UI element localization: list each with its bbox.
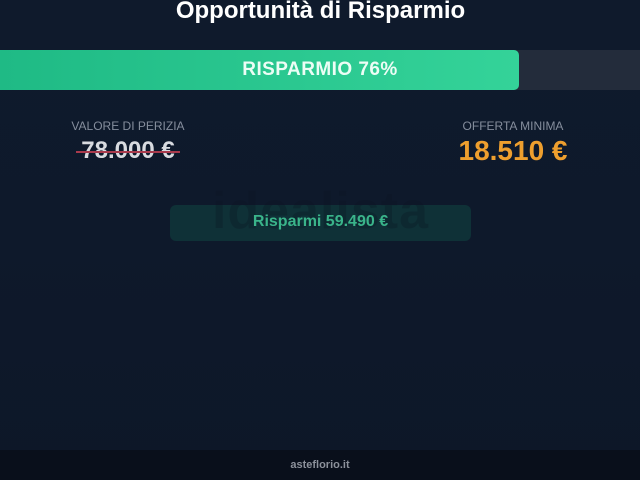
- savings text: Risparmi 59.490 €: [253, 213, 388, 230]
- watermark: idealista: [212, 182, 429, 240]
- progress fill: risparmio 76%: [0, 50, 519, 90]
- footer: asteflorio.it: [290, 459, 350, 471]
- minimum offer block: [458, 119, 568, 166]
- progress bar: [0, 50, 640, 90]
- appraisal label: VALORE DI PERIZIA: [71, 119, 185, 133]
- appraisal value block: [71, 119, 185, 164]
- appraisal amount, struck through: 78.000 €: [81, 137, 175, 164]
- strikethrough line: [76, 151, 180, 153]
- progress label: RISPARMIO 76%: [242, 59, 398, 80]
- minimum offer amount: 18.510 €: [458, 135, 568, 166]
- footer: [0, 450, 640, 480]
- savings badge: [170, 205, 471, 241]
- minimum offer label: OFFERTA MINIMA: [463, 119, 563, 133]
